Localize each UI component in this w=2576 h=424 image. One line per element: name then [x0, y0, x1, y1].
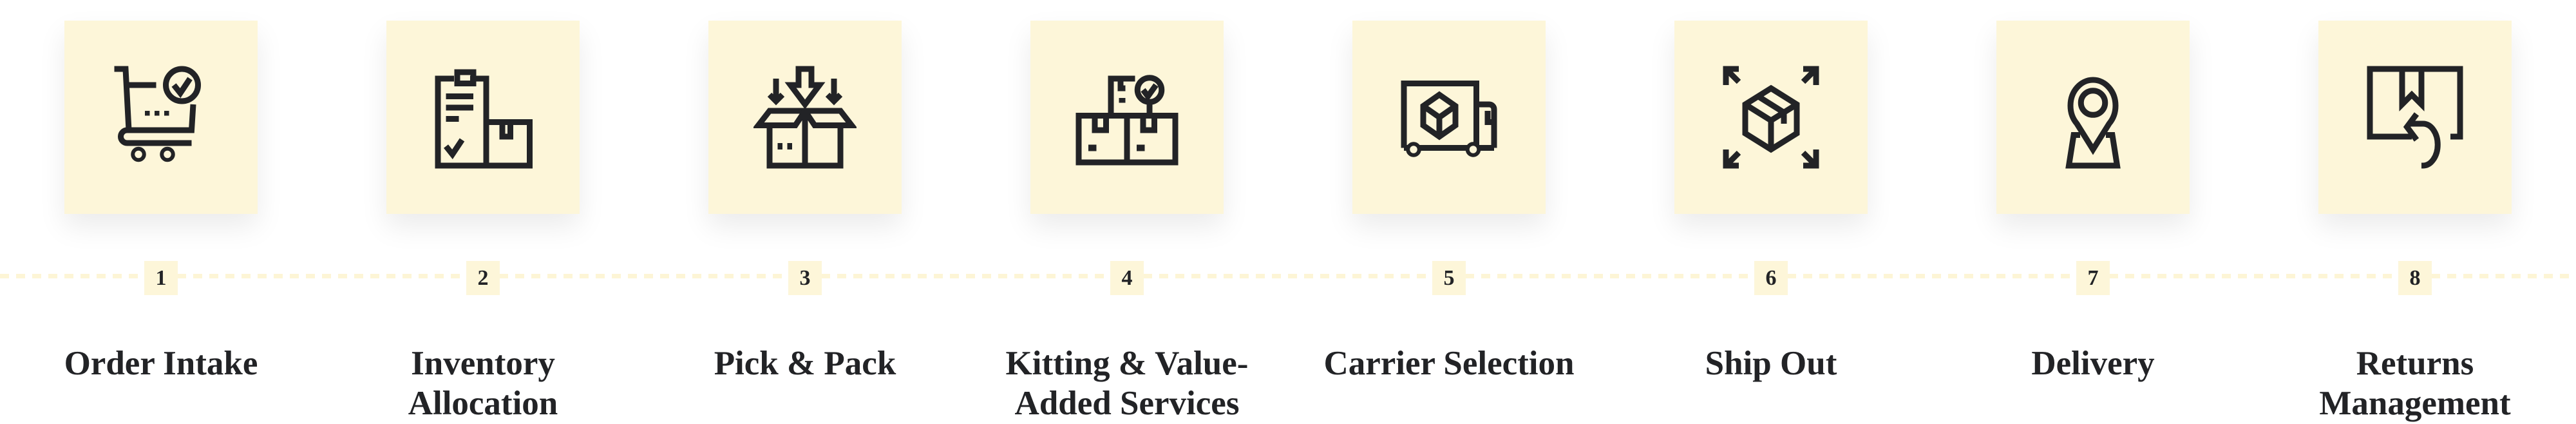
- icon: box with return arrow: [2318, 21, 2512, 214]
- number 7: [2076, 261, 2110, 295]
- icon: map pin: [1996, 21, 2190, 214]
- label: Management: [2319, 385, 2511, 422]
- number 6: 6: [1766, 266, 1776, 290]
- number 6: [1754, 261, 1788, 295]
- icon: truck with box: [1352, 21, 1546, 214]
- icon: cart with check: [64, 21, 258, 214]
- step 7: Delivery: [1994, 21, 2192, 382]
- icon: clipboard and box: [386, 21, 580, 214]
- label: Kitting & Value-: [1006, 345, 1248, 382]
- number 8: 8: [2410, 266, 2420, 290]
- number 5: 5: [1444, 266, 1454, 290]
- icon: stacked boxes with check: [1030, 21, 1224, 214]
- label: Allocation: [408, 385, 558, 422]
- icon: box with outward arrows: [1674, 21, 1868, 214]
- label: [408, 345, 558, 422]
- number 3: [788, 261, 822, 295]
- step 2: Inventory Allocation: [384, 21, 582, 422]
- label: Order Intake: [64, 345, 258, 382]
- icon: box with arrows: [708, 21, 902, 214]
- number 7: 7: [2088, 266, 2098, 290]
- step 4: Kitting: [1006, 21, 1248, 422]
- step 8: Returns Management: [2316, 21, 2514, 422]
- label: Pick & Pack: [714, 345, 896, 382]
- label: Returns: [2356, 345, 2474, 382]
- label: [1006, 345, 1248, 422]
- number 2: [466, 261, 500, 295]
- label: Delivery: [2031, 345, 2155, 382]
- step 5: Carrier Selection: [1323, 21, 1574, 382]
- label: Ship Out: [1705, 345, 1837, 382]
- number 1: [144, 261, 178, 295]
- number 4: 4: [1122, 266, 1132, 290]
- label: Added Services: [1015, 385, 1239, 422]
- step 1: Order Intake: [62, 21, 260, 382]
- label: Carrier Selection: [1323, 345, 1574, 382]
- number 1: 1: [156, 266, 166, 290]
- step 6: Ship Out: [1672, 21, 1870, 382]
- number 3: 3: [800, 266, 810, 290]
- step 3: Pick & Pack: [706, 21, 904, 382]
- number 5: [1432, 261, 1466, 295]
- number 4: [1110, 261, 1144, 295]
- label: Inventory: [411, 345, 555, 382]
- number 2: 2: [478, 266, 488, 290]
- label: [2319, 345, 2511, 422]
- number 8: [2398, 261, 2432, 295]
